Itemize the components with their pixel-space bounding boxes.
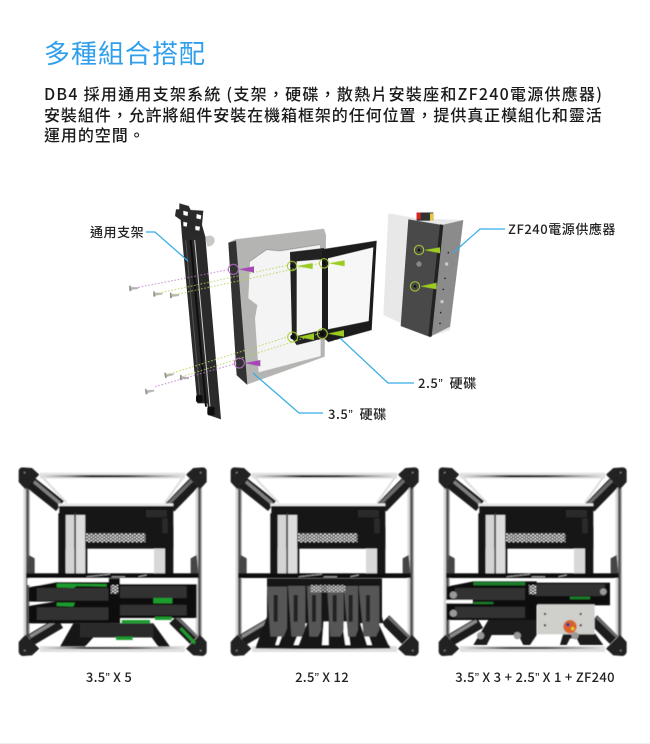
label: power supply: ZF240電源供應器 (508, 219, 616, 238)
3.5 inch hard drive (228, 229, 326, 385)
exploded diagram (129, 203, 463, 419)
description text: 安裝組件，允許將組件安裝在機箱框架的任何位置，提供真正模組化和靈活 (44, 102, 603, 126)
drives (255, 578, 394, 648)
drives (27, 578, 197, 647)
label: 2.5 inch drive: 2.5” 硬碟 (418, 373, 477, 392)
dashed screw lines (138, 263, 320, 387)
description text: DB4 採用通用支架系統 (支架，硬碟，散熱片安裝座和ZF240電源供應器) (44, 81, 603, 105)
caption: mixed configuration: 3.5” X 3 + 2.5” X 1 + ZF240 (455, 667, 615, 686)
universal bracket (175, 203, 221, 419)
description text: 運用的空間。 (44, 122, 146, 146)
case photo: 3.5 x 5 (19, 467, 207, 656)
label: 3.5 inch drive: 3.5” 硬碟 (328, 404, 387, 423)
ZF240 power supply (383, 213, 463, 337)
case photo: mixed configuration (439, 467, 627, 656)
screws (129, 285, 189, 394)
caption: 2.5 x 12: 2.5” X 12 (295, 667, 349, 686)
green and purple markers (228, 259, 345, 368)
2.5 inch hard drives (290, 241, 377, 345)
title: 多種組合搭配 (44, 34, 206, 71)
label: bracket: 通用支架 (90, 222, 144, 241)
leader lines (146, 229, 505, 413)
bottom edge line (0, 743, 650, 744)
description text (44, 81, 603, 146)
case photo: 2.5 x 12 (231, 467, 419, 656)
drives and power supply (446, 581, 610, 645)
caption: 3.5 x 5: 3.5” X 5 (86, 667, 132, 686)
